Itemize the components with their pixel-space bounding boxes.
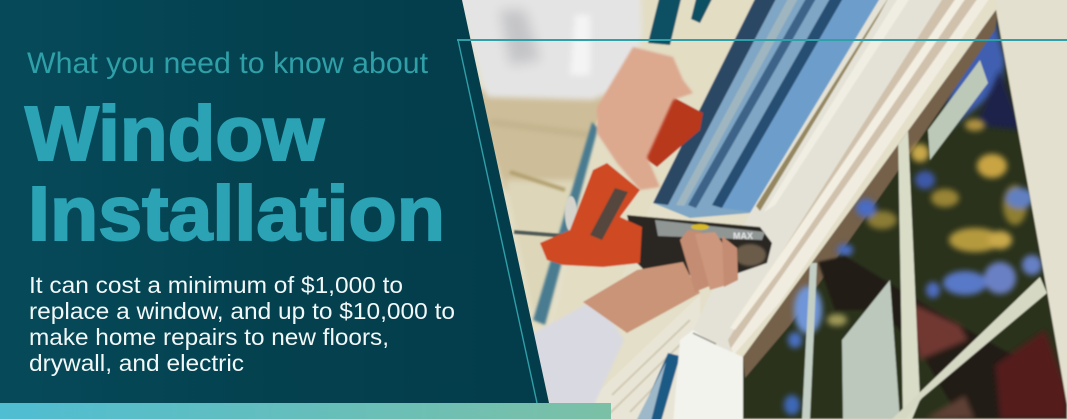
title: Installation	[28, 171, 445, 257]
heading: intro line: What you need to know about	[27, 47, 429, 80]
caulk gun rod	[514, 232, 565, 236]
reflected caulk gun	[818, 256, 1067, 419]
text block: cost summary	[29, 272, 455, 376]
blue trim post behind the gun	[533, 122, 598, 325]
text block: cost summary: drywall, and electric	[29, 350, 244, 376]
caulk tube	[627, 215, 772, 277]
bottom gradient bar	[0, 403, 611, 419]
title	[25, 91, 445, 257]
lower sleeve	[530, 298, 624, 405]
soffit	[470, 90, 605, 195]
lower hand with fingers	[583, 230, 738, 333]
caulk gun body	[540, 163, 642, 267]
caulk tube: MAX	[733, 231, 753, 241]
white window frame	[673, 0, 992, 419]
reflected pale panels	[928, 60, 988, 160]
caulk gun handle	[643, 97, 703, 167]
siding	[520, 0, 760, 419]
panel: title background	[0, 0, 549, 403]
photo: hands sealing a window with a caulk gun	[440, 0, 1067, 419]
text block: cost summary: make home repairs to new floors,	[29, 324, 389, 350]
upper sleeve	[455, 0, 642, 100]
window muntins	[898, 130, 920, 419]
blue window sash	[653, 0, 882, 218]
upper hand	[597, 47, 693, 190]
glass with tree reflection	[740, 0, 1067, 419]
caulk gun plunger plate	[565, 196, 577, 232]
title: Window	[25, 91, 325, 177]
text block: cost summary: replace a window, and up to $10,000 to	[29, 298, 455, 324]
teal outline frame	[457, 40, 1067, 403]
text block: cost summary: It can cost a minimum of $1,000 to	[29, 272, 403, 298]
right wall post	[995, 0, 1067, 419]
